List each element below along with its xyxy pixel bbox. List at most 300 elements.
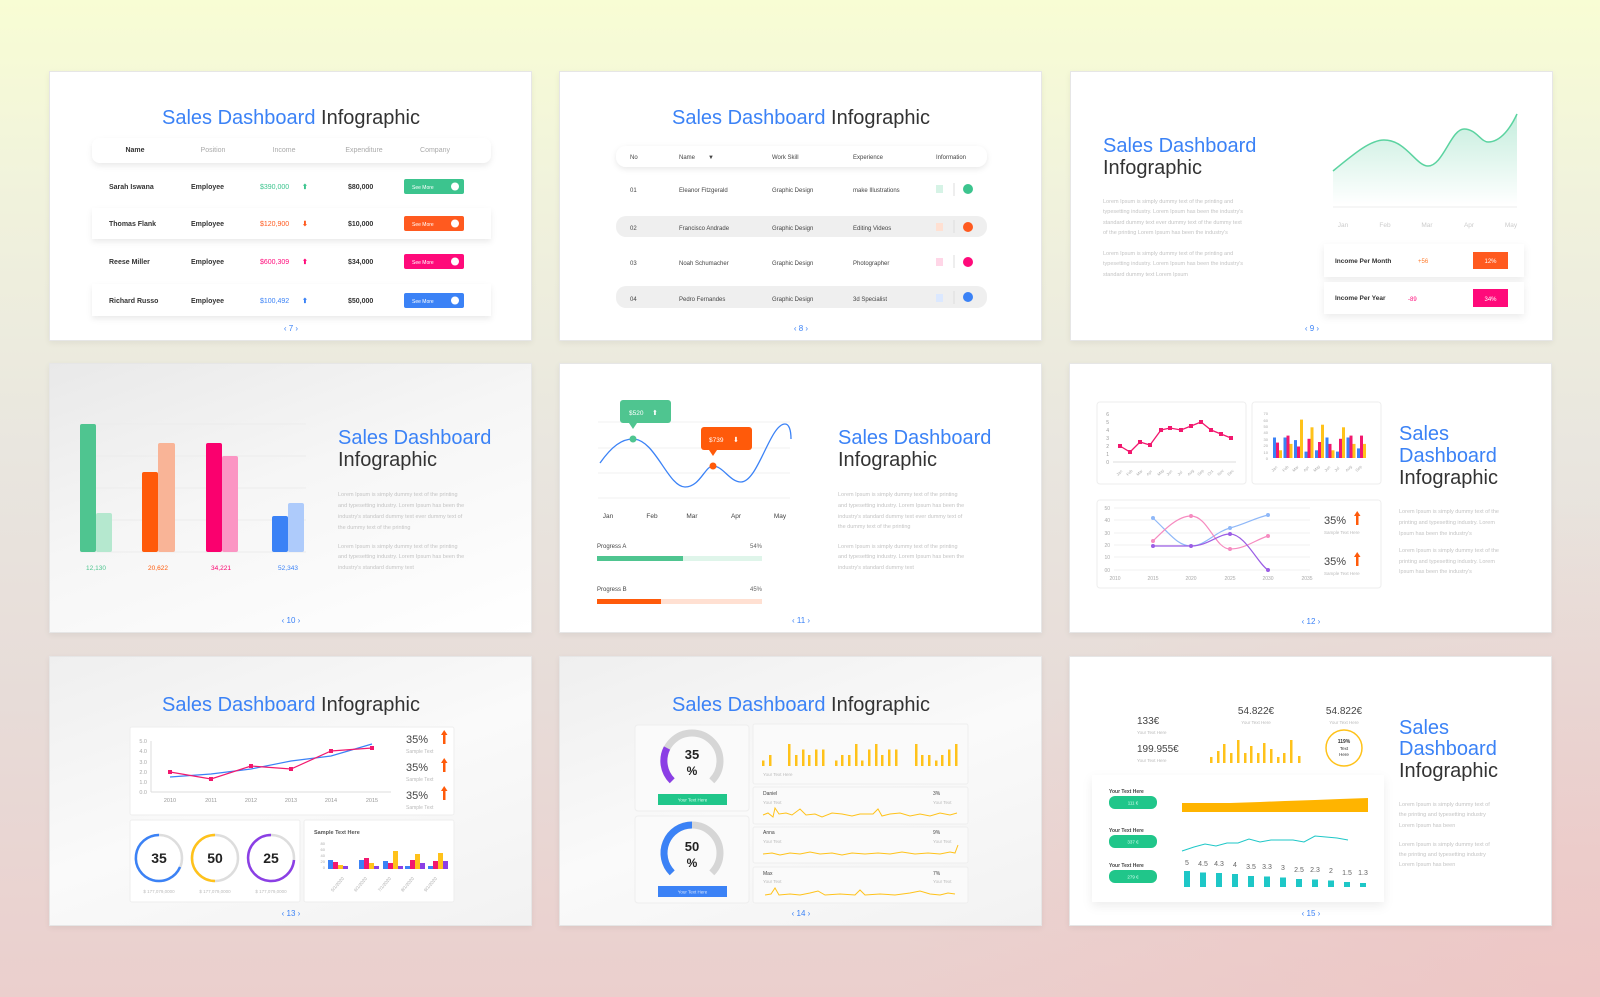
area chart: Jan [1338, 222, 1349, 229]
bar chart: 20,622 [148, 565, 168, 572]
card: income per year: 34% [1484, 297, 1497, 303]
wave chart: Jan [603, 513, 614, 520]
line chart box: 4.0 [139, 749, 147, 755]
kpi values [1137, 706, 1363, 763]
kpi values: Your Text Here [1241, 720, 1271, 725]
chart card: Your Text Here [1109, 828, 1144, 834]
multi-line chart box: 40 [1104, 518, 1110, 524]
text block: industry's standard dummy text [838, 565, 914, 571]
line chart box: 0.0 [139, 790, 147, 796]
table rows: See More [412, 222, 434, 228]
chart card: 1.5 [1342, 870, 1352, 877]
text block: and typesetting industry. Lorem Ipsum has been the [338, 554, 464, 560]
table rows: Noah Schumacher [679, 261, 729, 267]
grouped bar box: Sample Text Here [314, 830, 360, 836]
callout: $739: ⬇ [733, 436, 739, 444]
bar chart box: 30 [1264, 437, 1269, 442]
bar chart: yellow: Your Text Here [763, 772, 793, 777]
card: income per month [1324, 244, 1524, 277]
bar chart box: Feb [1281, 464, 1290, 473]
wave chart: Apr [731, 513, 742, 520]
sparkline: Daniel: Your Text [763, 800, 782, 805]
page number: ‹ 14 › [792, 909, 811, 918]
line chart box: 5 [1106, 420, 1109, 426]
sparkline: Daniel [753, 787, 968, 824]
kpi values: 199.955€ [1137, 744, 1179, 755]
bar chart box: Jul [1333, 465, 1340, 473]
chart card: 2.5 [1294, 867, 1304, 874]
table rows: ⬆ [302, 297, 308, 305]
table rows: ⬆ [302, 183, 308, 191]
bar chart: yellow [753, 724, 968, 784]
grouped bar box: 80 [321, 841, 326, 846]
line chart box: Dec [1226, 468, 1235, 477]
gauge 50%: % [687, 856, 698, 870]
gauge 50% [635, 816, 749, 903]
kpi values: 54.822€ [1238, 706, 1275, 717]
progress B: 45% [750, 587, 763, 593]
chart card: 279 € [1127, 874, 1139, 880]
grouped bar box: 60 [321, 847, 326, 852]
progress A [597, 544, 763, 561]
area chart [1333, 114, 1518, 229]
line chart box: 0 [1106, 460, 1109, 466]
circle stats box: $ 177,079,0000 [255, 889, 287, 894]
text block: industry's standard dummy text ever dummy text of [338, 514, 463, 520]
title [338, 427, 491, 471]
text block: printing and typesetting industry. Lorem [1399, 520, 1495, 526]
sparkline: Anna: Your Text [933, 839, 952, 844]
grouped bar box: 0 [323, 865, 326, 870]
text block: standard dummy text Lorem Ipsum [1103, 272, 1188, 278]
multi-line chart box: 2030 [1262, 576, 1274, 582]
wave chart: May [774, 513, 787, 520]
line chart box: 35% [406, 790, 428, 802]
bar chart box: 10 [1264, 450, 1269, 455]
multi-line chart box: 2015 [1147, 576, 1159, 582]
table rows: 01 [630, 188, 637, 194]
card: income per month: +56 [1418, 259, 1429, 265]
gauge 50%: 50 [685, 839, 699, 854]
line chart box: 2015 [366, 798, 378, 804]
wave chart [598, 400, 791, 520]
line chart box: 3.0 [139, 760, 147, 766]
text block: Lorem Ipsum has been [1399, 823, 1455, 829]
line chart box: Sep [1196, 468, 1205, 477]
panel: slide 11 wave chart and progress [559, 363, 1042, 633]
card: income per month: 12% [1484, 259, 1497, 265]
multi-line chart box: 35% [1324, 515, 1346, 527]
grouped bar box: 20 [321, 859, 326, 864]
sparkline: Anna: Your Text [763, 839, 782, 844]
table header: Work Skill [772, 155, 799, 161]
table rows: $120,900 [260, 221, 289, 228]
gauge 35%: Your Text Here [678, 798, 708, 802]
page number: ‹ 11 › [792, 616, 810, 625]
card: income per year [1324, 282, 1524, 314]
chart card: 1.3 [1358, 870, 1368, 877]
callout: $520: ⬆ [652, 409, 658, 417]
line chart box: Aug [1186, 468, 1195, 477]
callout: $520 [620, 400, 671, 429]
sparkline: Max: Your Text [933, 879, 952, 884]
line chart box: 6 [1106, 412, 1109, 418]
table rows: Employee [191, 221, 224, 228]
title [1103, 135, 1256, 179]
bar chart box: May [1312, 464, 1321, 473]
line chart box: Feb [1125, 468, 1134, 477]
line chart box: Oct [1206, 468, 1215, 477]
table rows: 3d Specialist [853, 297, 887, 303]
table header: No [630, 155, 638, 161]
percent circle [1326, 730, 1362, 766]
multi-line chart box: 10 [1104, 555, 1110, 561]
bar chart box: Apr [1302, 464, 1311, 473]
table rows: $50,000 [348, 298, 373, 305]
percent circle: Here [1339, 752, 1349, 757]
table rows: Employee [191, 259, 224, 266]
multi-line chart box: 00 [1104, 568, 1110, 574]
title [838, 427, 991, 471]
title: Dashboard [1399, 445, 1497, 467]
line chart box: 2013 [285, 798, 297, 804]
circle stats box: $ 177,079,0000 [143, 889, 175, 894]
panel: slide 8 table [559, 71, 1042, 341]
table header: Income [273, 147, 296, 154]
wave chart: Feb [646, 513, 658, 520]
mini bar chart [1210, 740, 1300, 763]
gauge 35%: % [687, 764, 698, 778]
text block: Lorem Ipsum is simply dummy text of the printing [838, 544, 958, 550]
table header [92, 138, 491, 163]
text block: standard dummy text ever dummy text of the dummy text [1103, 220, 1242, 226]
bar chart box [1252, 402, 1381, 484]
kpi values: Your Text Here [1137, 758, 1167, 763]
chart card: 337 € [1127, 840, 1139, 844]
progress A: 54% [750, 544, 763, 550]
text block: of the printing Lorem Ipsum has been the industry's [1103, 230, 1228, 236]
sparkline: Max [753, 867, 968, 903]
multi-line chart box: Sample Text Here [1324, 571, 1360, 576]
chart card: Your Text Here [1109, 863, 1144, 869]
callout: $520: $520 [629, 410, 644, 417]
page number: ‹ 12 › [1302, 617, 1321, 626]
text block: typesetting industry. Lorem Ipsum has been the industry's [1103, 261, 1243, 267]
table rows: ⬆ [302, 258, 308, 266]
grouped bar box [304, 820, 454, 902]
line chart box: 2.0 [139, 770, 147, 776]
page number: ‹ 9 › [1305, 324, 1319, 333]
table header: Company [420, 147, 450, 154]
sparkline: Daniel: Your Text [933, 800, 952, 805]
table rows: $10,000 [348, 221, 373, 228]
gauge 35% [635, 725, 749, 811]
text block: Lorem Ipsum is simply dummy text of the printing and [1103, 199, 1233, 205]
title: Sales Dashboard [1103, 135, 1256, 157]
table rows: $34,000 [348, 259, 373, 266]
kpi values: Your Text Here [1137, 730, 1167, 735]
grouped bar box: 7/1/2020 [377, 876, 392, 893]
text block: Ipsum has been the industry's [1399, 531, 1472, 537]
title: Infographic [338, 449, 437, 471]
title: Dashboard [1399, 738, 1497, 760]
text block: Lorem Ipsum is simply dummy text of [1399, 802, 1490, 808]
text block: Lorem Ipsum is simply dummy text of the printing [338, 492, 458, 498]
chart card: 4 [1233, 862, 1237, 869]
text block: and typesetting industry. Lorem Ipsum has been the [338, 503, 464, 509]
panel: slide 7 table [49, 71, 532, 341]
table rows: Eleanor Fitzgerald [679, 188, 728, 194]
title: Infographic [1399, 760, 1498, 782]
line chart box: 1.0 [139, 780, 147, 786]
text block: Lorem Ipsum is simply dummy text of the printing [838, 492, 958, 498]
page number: ‹ 10 › [282, 616, 301, 625]
line chart box: 2010 [164, 798, 176, 804]
chart card: 3.5 [1246, 864, 1256, 871]
bar chart box: 60 [1264, 418, 1269, 423]
panel: slide 9 area chart [1070, 71, 1553, 341]
text block: the printing and typesetting industry [1399, 852, 1486, 858]
chart card [1092, 775, 1384, 902]
line chart box: Jul [1176, 469, 1183, 477]
line chart box: Sample Text [406, 749, 434, 755]
panel: slide 12 charts [1069, 363, 1552, 633]
title: Infographic [838, 449, 937, 471]
text block: Lorem Ipsum is simply dummy text of the [1399, 509, 1499, 515]
multi-line chart box: 50 [1104, 506, 1110, 512]
multi-line chart box: Sample Text Here [1324, 530, 1360, 535]
text block: industry's standard dummy text ever dummy text of [838, 514, 963, 520]
table rows: 02 [630, 226, 637, 232]
bar chart box: 40 [1264, 430, 1269, 435]
table rows: $600,309 [260, 259, 289, 266]
title: Infographic [1399, 467, 1498, 489]
line chart box: Jan [1115, 469, 1123, 477]
line chart box: 1 [1106, 452, 1109, 458]
text block: Ipsum has been the industry's [1399, 569, 1472, 575]
text block: printing and typesetting industry. Lorem [1399, 559, 1495, 565]
text block: Lorem Ipsum is simply dummy text of the [1399, 548, 1499, 554]
bar chart [80, 424, 306, 572]
line chart box: Sample Text [406, 805, 434, 811]
table rows: Employee [191, 298, 224, 305]
sparkline: Daniel: 3% [933, 791, 941, 797]
circle stats box: $ 177,079,0000 [199, 889, 231, 894]
text block: the dummy text of the printing [338, 525, 410, 531]
bar chart: 52,343 [278, 565, 298, 572]
page number: ‹ 8 › [794, 324, 808, 333]
title: Sales Dashboard Infographic [162, 107, 420, 129]
bar chart box: 0 [1266, 456, 1269, 461]
area chart: May [1505, 222, 1518, 229]
line chart box [1097, 402, 1246, 484]
percent circle: 119% [1338, 739, 1351, 745]
text block: Lorem Ipsum has been [1399, 862, 1455, 868]
multi-line chart box: 2010 [1109, 576, 1121, 582]
grouped bar box: 9/1/2020 [423, 876, 438, 893]
text block: Lorem Ipsum is simply dummy text of the printing [338, 544, 458, 550]
table rows: 04 [630, 297, 637, 303]
table header: ▼ [708, 155, 714, 161]
text block: Lorem Ipsum is simply dummy text of the printing and [1103, 251, 1233, 257]
grouped bar box: 8/1/2020 [400, 876, 415, 893]
grouped bar box: 6/1/2020 [353, 876, 368, 893]
callout: $739 [701, 427, 752, 456]
text block: the printing and typesetting industry [1399, 812, 1486, 818]
table header: Experience [853, 155, 884, 161]
multi-line chart box: 35% [1324, 556, 1346, 568]
sparkline: Max: 7% [933, 871, 941, 877]
panel: slide 13 line chart and circles [49, 656, 532, 926]
table header: Information [936, 155, 966, 161]
chart card: 2 [1329, 868, 1333, 875]
grouped bar box: 40 [321, 853, 326, 858]
title: Sales Dashboard Infographic [672, 107, 930, 129]
table rows: Pedro Fernandes [679, 297, 725, 303]
sparkline: Max: Your Text [763, 879, 782, 884]
table rows [616, 183, 987, 308]
text block: Lorem Ipsum is simply dummy text of [1399, 842, 1490, 848]
area chart: Mar [1421, 222, 1433, 229]
multi-line chart box: 2025 [1224, 576, 1236, 582]
sparkline: Anna: 9% [933, 830, 941, 836]
bar chart box: 70 [1264, 411, 1269, 416]
table rows: $80,000 [348, 184, 373, 191]
title: Sales [1399, 717, 1449, 739]
title: Infographic [1103, 157, 1202, 179]
text block: industry's standard dummy text [338, 565, 414, 571]
circle stats box [130, 820, 300, 902]
table header [616, 146, 987, 167]
title: Sales Dashboard [838, 427, 991, 449]
wave chart: Mar [686, 513, 698, 520]
multi-line chart box: 30 [1104, 531, 1110, 537]
circle stats box: 50 [207, 850, 223, 866]
chart card: 4.5 [1198, 861, 1208, 868]
text block [338, 492, 464, 571]
table rows: See More [412, 260, 434, 266]
page number: ‹ 13 › [282, 909, 301, 918]
area chart: Feb [1379, 222, 1391, 229]
line chart box: 2011 [205, 798, 217, 804]
chart card: 5 [1185, 860, 1189, 867]
kpi values: 133€ [1137, 716, 1160, 727]
line chart box: 5.0 [139, 739, 147, 745]
line chart box: 3 [1106, 436, 1109, 442]
gauge 50%: Your Text Here [678, 890, 708, 894]
table rows: 03 [630, 261, 637, 267]
sparkline: Anna: Anna [763, 830, 775, 836]
table header: Expenditure [345, 147, 383, 154]
chart card: 3.3 [1262, 864, 1272, 871]
circle stats box: 25 [263, 850, 279, 866]
table header: Name [125, 147, 145, 154]
title: Sales [1399, 423, 1449, 445]
table rows: $390,000 [260, 184, 289, 191]
title: Sales Dashboard [338, 427, 491, 449]
panel: slide 10 bar chart [49, 363, 532, 633]
text block: the dummy text of the printing [838, 524, 910, 530]
card: income per month: Income Per Month [1335, 258, 1391, 265]
area chart: Apr [1464, 222, 1475, 229]
table rows: See More [412, 185, 434, 191]
line chart box: 35% [406, 734, 428, 746]
table rows: Graphic Design [772, 226, 813, 232]
text block [1399, 509, 1499, 575]
table rows: Graphic Design [772, 188, 813, 194]
line chart box: Sample Text [406, 777, 434, 783]
line chart box: Apr [1145, 468, 1154, 477]
table rows: $100,492 [260, 298, 289, 305]
chart card: 4.3 [1214, 861, 1224, 868]
chart card: 111 € [1128, 800, 1139, 806]
chart card: 3 [1281, 865, 1285, 872]
bar chart box: Jun [1323, 465, 1331, 473]
text block: typesetting industry. Lorem Ipsum has been the industry's [1103, 209, 1243, 215]
bar chart: 12,130 [86, 565, 106, 572]
line chart box: Nov [1216, 468, 1225, 477]
text block: and typesetting industry. Lorem Ipsum has been the [838, 503, 964, 509]
bar chart box: Jan [1270, 465, 1278, 473]
table rows: Thomas Flank [109, 221, 156, 228]
progress B: Progress B [597, 587, 627, 593]
panel: slide 14 gauges and sparklines [559, 656, 1042, 926]
title [1399, 717, 1498, 782]
card: income per year: Income Per Year [1335, 295, 1386, 302]
bar chart box: 50 [1264, 424, 1269, 429]
title: Sales Dashboard Infographic [672, 694, 930, 716]
table header: Name [679, 155, 696, 161]
multi-line chart box: 20 [1104, 543, 1110, 549]
page number: ‹ 7 › [284, 324, 298, 333]
table rows: Richard Russo [109, 298, 158, 305]
multi-line chart box [1097, 500, 1381, 588]
bar chart box: 20 [1264, 443, 1269, 448]
title [1399, 423, 1498, 489]
card: income per year: -89 [1408, 297, 1417, 303]
chart card: 2.3 [1310, 867, 1320, 874]
circle stats box: 35 [151, 850, 167, 866]
bar chart box: Mar [1291, 464, 1300, 473]
line chart box: Jun [1165, 469, 1173, 477]
line chart box: Mar [1135, 468, 1144, 477]
multi-line chart box: 2020 [1185, 576, 1197, 582]
text block [1399, 802, 1490, 868]
table rows: See More [412, 299, 434, 305]
table rows: make Illustrations [853, 188, 900, 194]
table rows: Photographer [853, 261, 889, 267]
progress B [597, 587, 763, 604]
kpi values: 54.822€ [1326, 706, 1363, 717]
table rows: Reese Miller [109, 259, 150, 266]
gauge 35%: 35 [685, 747, 699, 762]
line chart box: 4 [1106, 428, 1109, 434]
line chart box: 35% [406, 762, 428, 774]
table rows: Sarah Iswana [109, 184, 154, 191]
title: Sales Dashboard Infographic [162, 694, 420, 716]
panel: slide 15 kpi dashboard [1069, 656, 1552, 926]
line chart box: May [1156, 468, 1165, 477]
bar chart box: Sep [1354, 464, 1363, 473]
bar chart: 34,221 [211, 565, 231, 572]
table rows: Graphic Design [772, 261, 813, 267]
page number: ‹ 15 › [1302, 909, 1321, 918]
table rows: Graphic Design [772, 297, 813, 303]
kpi values: Your Text Here [1329, 720, 1359, 725]
text block [838, 492, 964, 571]
sparkline: Anna [753, 827, 968, 863]
table header: Position [201, 147, 226, 154]
